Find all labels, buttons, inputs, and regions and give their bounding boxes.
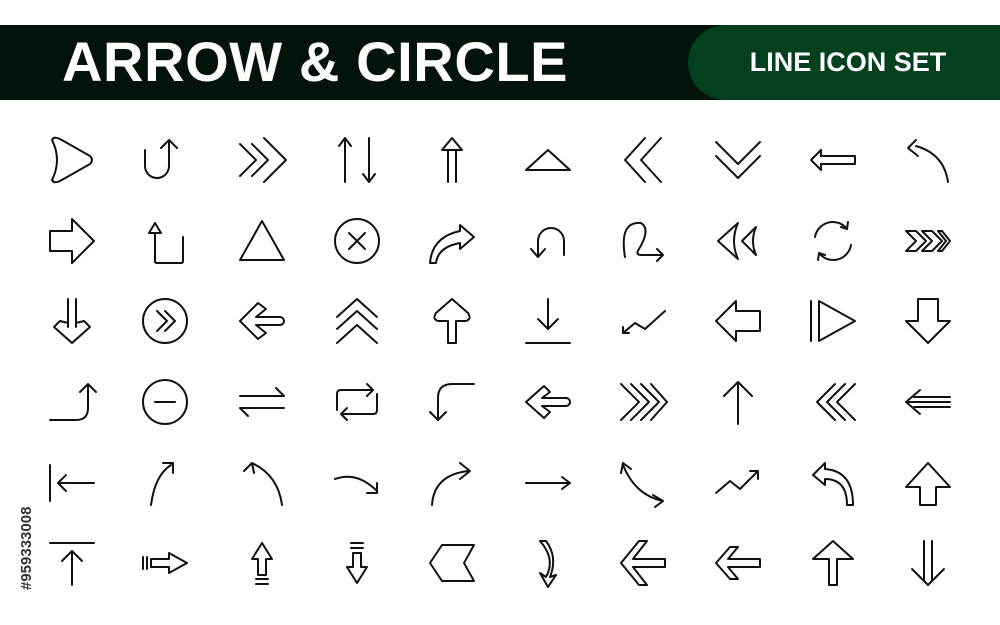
row 2 (50, 219, 94, 263)
stock id: #959333008 (18, 507, 35, 590)
row 5 (50, 465, 94, 501)
row 3 (54, 299, 90, 343)
row 1 (52, 138, 92, 182)
row 4 (50, 384, 96, 420)
subtitle: LINE ICON SET (750, 47, 946, 77)
header pill (688, 25, 1000, 100)
header bar (0, 25, 1000, 100)
title: ARROW & CIRCLE (62, 30, 568, 93)
row 6 (50, 543, 94, 585)
